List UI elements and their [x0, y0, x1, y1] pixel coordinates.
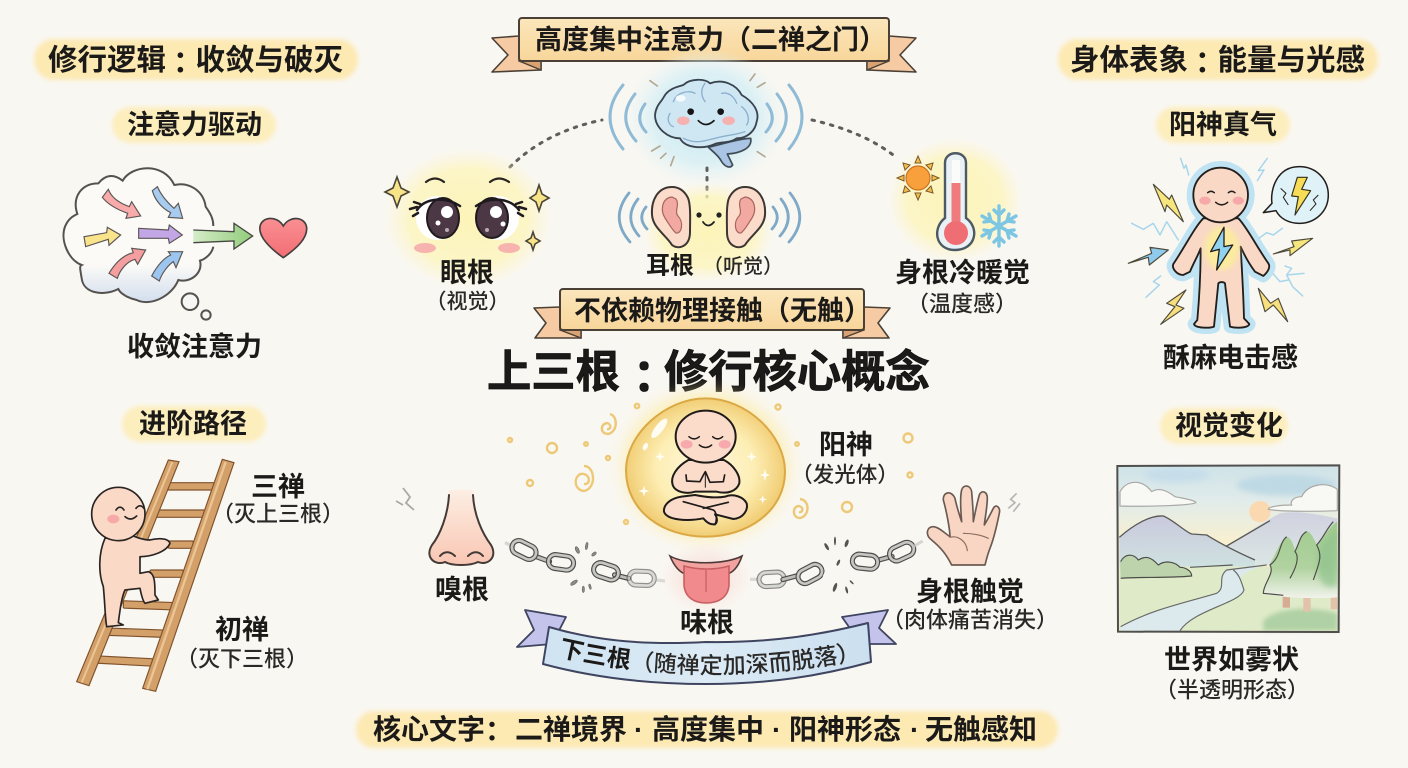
label: first dhyana: 初禅	[215, 615, 269, 645]
label: yang spirit: 阳神	[819, 430, 873, 460]
icon: hand	[927, 486, 1020, 565]
ribbon: lower three roots	[516, 609, 897, 685]
heading: practice logic: ：	[173, 39, 203, 81]
icon: nose	[396, 488, 493, 565]
label: ear root: （听觉）	[703, 255, 783, 278]
label: body root touch: 身根触觉	[916, 577, 1024, 607]
footer: core text: ·	[634, 714, 643, 744]
label: eye root	[426, 258, 510, 314]
label: taste root: 味根	[680, 608, 734, 638]
footer: core text: ·	[910, 714, 919, 744]
footer: core text: 无触感知	[925, 714, 1037, 744]
subheading: advancement path	[122, 406, 266, 442]
icon: thermometer with sun and snowflake	[887, 138, 1023, 262]
icon: golden orb with meditating figure	[614, 384, 798, 548]
footer: core text: 高度集中	[652, 714, 764, 744]
footer: core text: 二禅境界	[515, 714, 627, 744]
illustration: figure climbing a ladder	[77, 459, 234, 691]
footer: core text: 阳神形态	[789, 714, 901, 744]
dotted line: brain to ears	[706, 168, 708, 197]
decoration: golden swirls and orbs	[508, 404, 912, 524]
dotted line: brain to temperature	[812, 120, 897, 158]
heading: body signs	[1058, 39, 1378, 81]
subheading: visual change: 视觉变化	[1175, 411, 1283, 441]
subheading: advancement path: 进阶路径	[139, 409, 247, 439]
icon: tongue	[660, 542, 752, 614]
footer: core text	[356, 709, 1058, 749]
label: body root warm and cold: （温度感）	[907, 292, 1017, 316]
label: body root touch	[882, 577, 1058, 632]
label: smell root: 嗅根	[435, 575, 489, 605]
heading: body signs: 身体表象	[1070, 44, 1188, 76]
label: third dhyana: 三禅	[251, 472, 305, 502]
ribbon: high concentration	[492, 18, 916, 72]
heading: body signs: ：	[1195, 39, 1225, 81]
icon: sparkling eyes	[384, 148, 552, 288]
heading: body signs: 能量与光感	[1218, 44, 1365, 76]
label: world like mist	[1155, 645, 1309, 702]
label: third dhyana	[212, 472, 344, 526]
subheading: attention driven	[112, 107, 276, 143]
dotted line: brain to eyes	[510, 120, 602, 167]
label: first dhyana	[176, 615, 308, 672]
icon: thought cloud with arrows into a heart	[63, 168, 307, 320]
icon: ears with sound waves	[619, 182, 800, 282]
icon: broken chain, right	[750, 537, 923, 594]
footer: core text: ：	[485, 709, 513, 749]
illustration: misty landscape	[1117, 465, 1339, 632]
footer: core text: 核心文字	[373, 714, 485, 744]
ribbon: no physical contact	[534, 289, 890, 338]
illustration: glowing body with lightning	[1128, 158, 1328, 328]
label: eye root: 眼根	[440, 258, 494, 288]
main title: 修行核心概念	[664, 348, 930, 396]
icon: broken chain, left	[505, 538, 665, 593]
heading: practice logic: 修行逻辑	[48, 44, 166, 76]
ribbon: lower three roots: 下三根（随禅定加深而脱落）	[562, 638, 844, 676]
label: ear root	[646, 252, 783, 280]
label: ear root: 耳根	[646, 252, 694, 280]
icon: smiling brain with waves	[610, 48, 802, 188]
label: body root warm and cold: 身根冷暖觉	[895, 258, 1030, 288]
label: yang spirit	[791, 430, 899, 487]
main title: ：	[633, 340, 677, 404]
ribbon: no physical contact: 不依赖物理接触（无触）	[574, 296, 871, 326]
footer: core text: ·	[772, 714, 781, 744]
subheading: yang spirit true qi	[1156, 107, 1290, 143]
label: first dhyana: （灭下三根）	[176, 646, 308, 672]
label: yang spirit: （发光体）	[791, 463, 899, 487]
main title: 上三根	[487, 348, 620, 396]
label: world like mist: 世界如雾状	[1164, 645, 1299, 675]
heading: practice logic	[34, 39, 358, 81]
label: converge attention: 收敛注意力	[127, 332, 262, 362]
label: body root warm and cold	[895, 258, 1030, 316]
ribbon: high concentration: 高度集中注意力（二禅之门）	[535, 25, 886, 55]
label: eye root: （视觉）	[426, 290, 510, 314]
label: body root touch: （肉体痛苦消失）	[882, 608, 1058, 632]
label: tingling electric sensation: 酥麻电击感	[1163, 342, 1298, 373]
label: third dhyana: （灭上三根）	[212, 502, 344, 526]
label: world like mist: （半透明形态）	[1155, 678, 1309, 702]
subheading: attention driven: 注意力驱动	[127, 110, 262, 140]
heading: practice logic: 收敛与破灭	[196, 44, 343, 76]
subheading: yang spirit true qi: 阳神真气	[1169, 110, 1277, 140]
